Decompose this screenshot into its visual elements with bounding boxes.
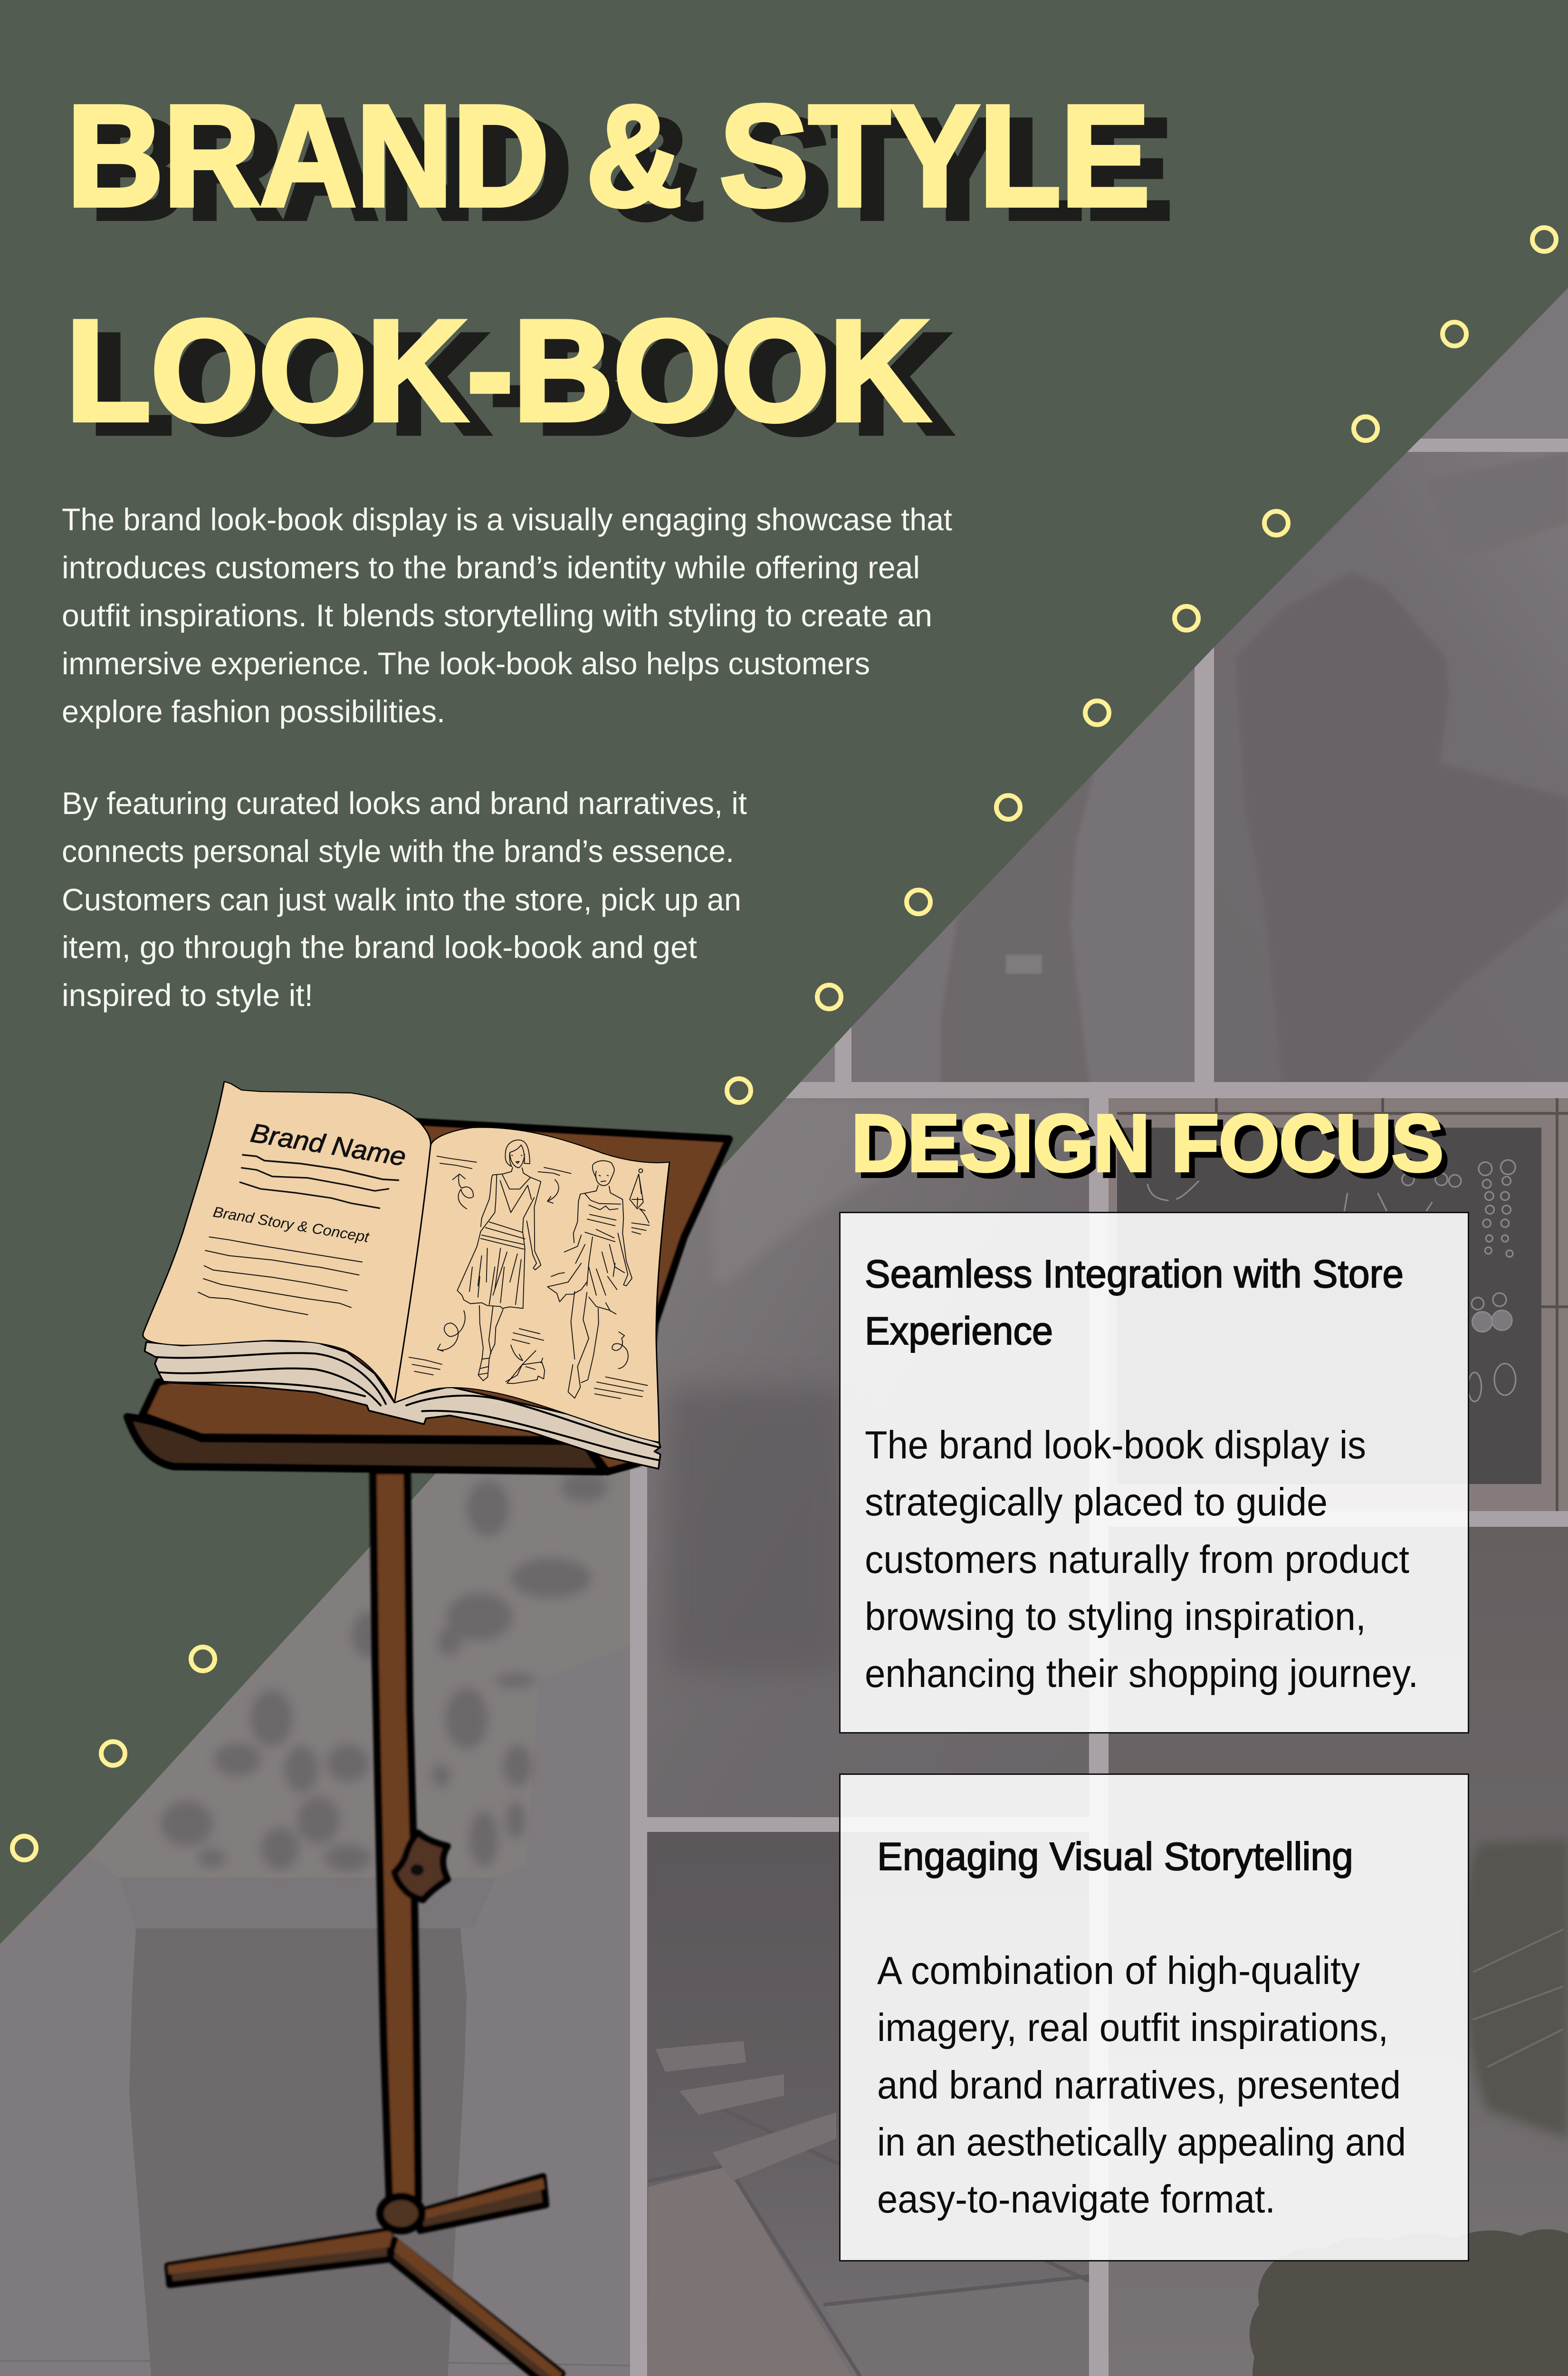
card: engaging visual storytelling bbox=[840, 1774, 1468, 2261]
intro paragraph 1: immersive experience. The look-book also helps customers bbox=[62, 646, 870, 681]
photo panel: plants bbox=[1109, 1527, 1568, 2376]
card body: browsing to styling inspiration, bbox=[865, 1594, 1366, 1638]
intro paragraph 2: inspired to style it! bbox=[62, 977, 313, 1013]
heading shadow: DESIGN FOCUS bbox=[857, 1104, 1449, 1194]
card body: strategically placed to guide bbox=[865, 1480, 1328, 1524]
photo panel: coat figure bbox=[936, 767, 1100, 1082]
intro paragraph 2: Customers can just walk into the store, pick up an bbox=[62, 882, 741, 917]
book fashion sketches bbox=[409, 1140, 649, 1399]
sketch: shoe bbox=[506, 1351, 545, 1383]
card body: easy-to-navigate format. bbox=[877, 2177, 1275, 2221]
intro paragraph 2: By featuring curated looks and brand narratives, it bbox=[62, 786, 747, 821]
intro paragraph 2: connects personal style with the brand’s essence. bbox=[62, 834, 734, 869]
intro paragraph 1 bbox=[62, 502, 952, 729]
book squiggle lines bbox=[198, 1155, 398, 1315]
card heading: Engaging Visual Storytelling bbox=[877, 1834, 1353, 1878]
look-book left page bbox=[143, 1082, 430, 1402]
sketch: earring bbox=[630, 1169, 643, 1209]
look-book right page bbox=[394, 1127, 669, 1442]
heading: design focus bbox=[851, 1098, 1449, 1194]
intro paragraph 2: item, go through the brand look-book and get bbox=[62, 929, 697, 965]
title lettering bbox=[66, 76, 1150, 450]
photo panel: top right person bbox=[1214, 451, 1568, 1088]
title shadow: BRAND & STYLE bbox=[90, 89, 1173, 249]
diagonal dotted ring pattern bbox=[12, 228, 1556, 1860]
photo panel: upper right corner bbox=[1378, 285, 1568, 439]
card heading: Seamless Integration with Store bbox=[865, 1252, 1404, 1296]
card body: imagery, real outfit inspirations, bbox=[877, 2005, 1388, 2050]
card body: The brand look-book display is bbox=[865, 1423, 1366, 1467]
card body: in an aesthetically appealing and bbox=[877, 2120, 1406, 2164]
title lettering: BRAND & STYLE bbox=[67, 76, 1150, 236]
title shadow: LOOK-BOOK bbox=[89, 304, 952, 464]
card body bbox=[865, 1423, 1418, 1696]
title bbox=[66, 76, 1173, 464]
photo grid lines bbox=[630, 439, 1568, 2376]
sketch: curly arrows bbox=[452, 1174, 473, 1209]
music stand with open look-book bbox=[127, 1082, 729, 2376]
book text: brand name: Brand Name bbox=[249, 1118, 408, 1171]
photo panel: wall at centre bbox=[647, 1098, 1089, 1817]
stand legs and pole bbox=[168, 1471, 562, 2376]
sketch: annotation squiggles bbox=[409, 1156, 649, 1399]
look-book page stack bbox=[144, 1341, 660, 1469]
photo panel: floor display bbox=[647, 1832, 1089, 2376]
card body bbox=[877, 1948, 1406, 2221]
book text: brand story and concept: Brand Story & Concept bbox=[212, 1203, 371, 1245]
photo panel: sweater and trousers bbox=[0, 1402, 630, 2376]
photo panel: jewellery display bbox=[1109, 1098, 1568, 1511]
title lettering: LOOK-BOOK bbox=[66, 290, 929, 450]
card body: A combination of high-quality bbox=[877, 1948, 1360, 1993]
card heading: Experience bbox=[865, 1309, 1053, 1353]
sketch: figure in drop-waist dress bbox=[457, 1140, 541, 1381]
card heading bbox=[865, 1252, 1404, 1353]
card body: customers naturally from product bbox=[865, 1537, 1409, 1581]
intro paragraph 1: outfit inspirations. It blends storytelling with styling to create an bbox=[62, 598, 932, 633]
intro paragraph 2 bbox=[62, 786, 747, 1013]
heading lettering: DESIGN FOCUS bbox=[851, 1098, 1444, 1188]
intro paragraph 1: introduces customers to the brand’s identity while offering real bbox=[62, 550, 920, 585]
card body: enhancing their shopping journey. bbox=[865, 1651, 1418, 1696]
card: seamless integration bbox=[840, 1213, 1468, 1733]
stand desk and lip bbox=[127, 1122, 729, 1472]
card body: and brand narratives, presented bbox=[877, 2063, 1401, 2107]
intro paragraph 1: explore fashion possibilities. bbox=[62, 694, 445, 729]
sketch: figure in fringe dress bbox=[547, 1161, 632, 1398]
intro paragraph 1: The brand look-book display is a visually engaging showcase that bbox=[62, 502, 952, 537]
title shadow bbox=[89, 89, 1173, 464]
